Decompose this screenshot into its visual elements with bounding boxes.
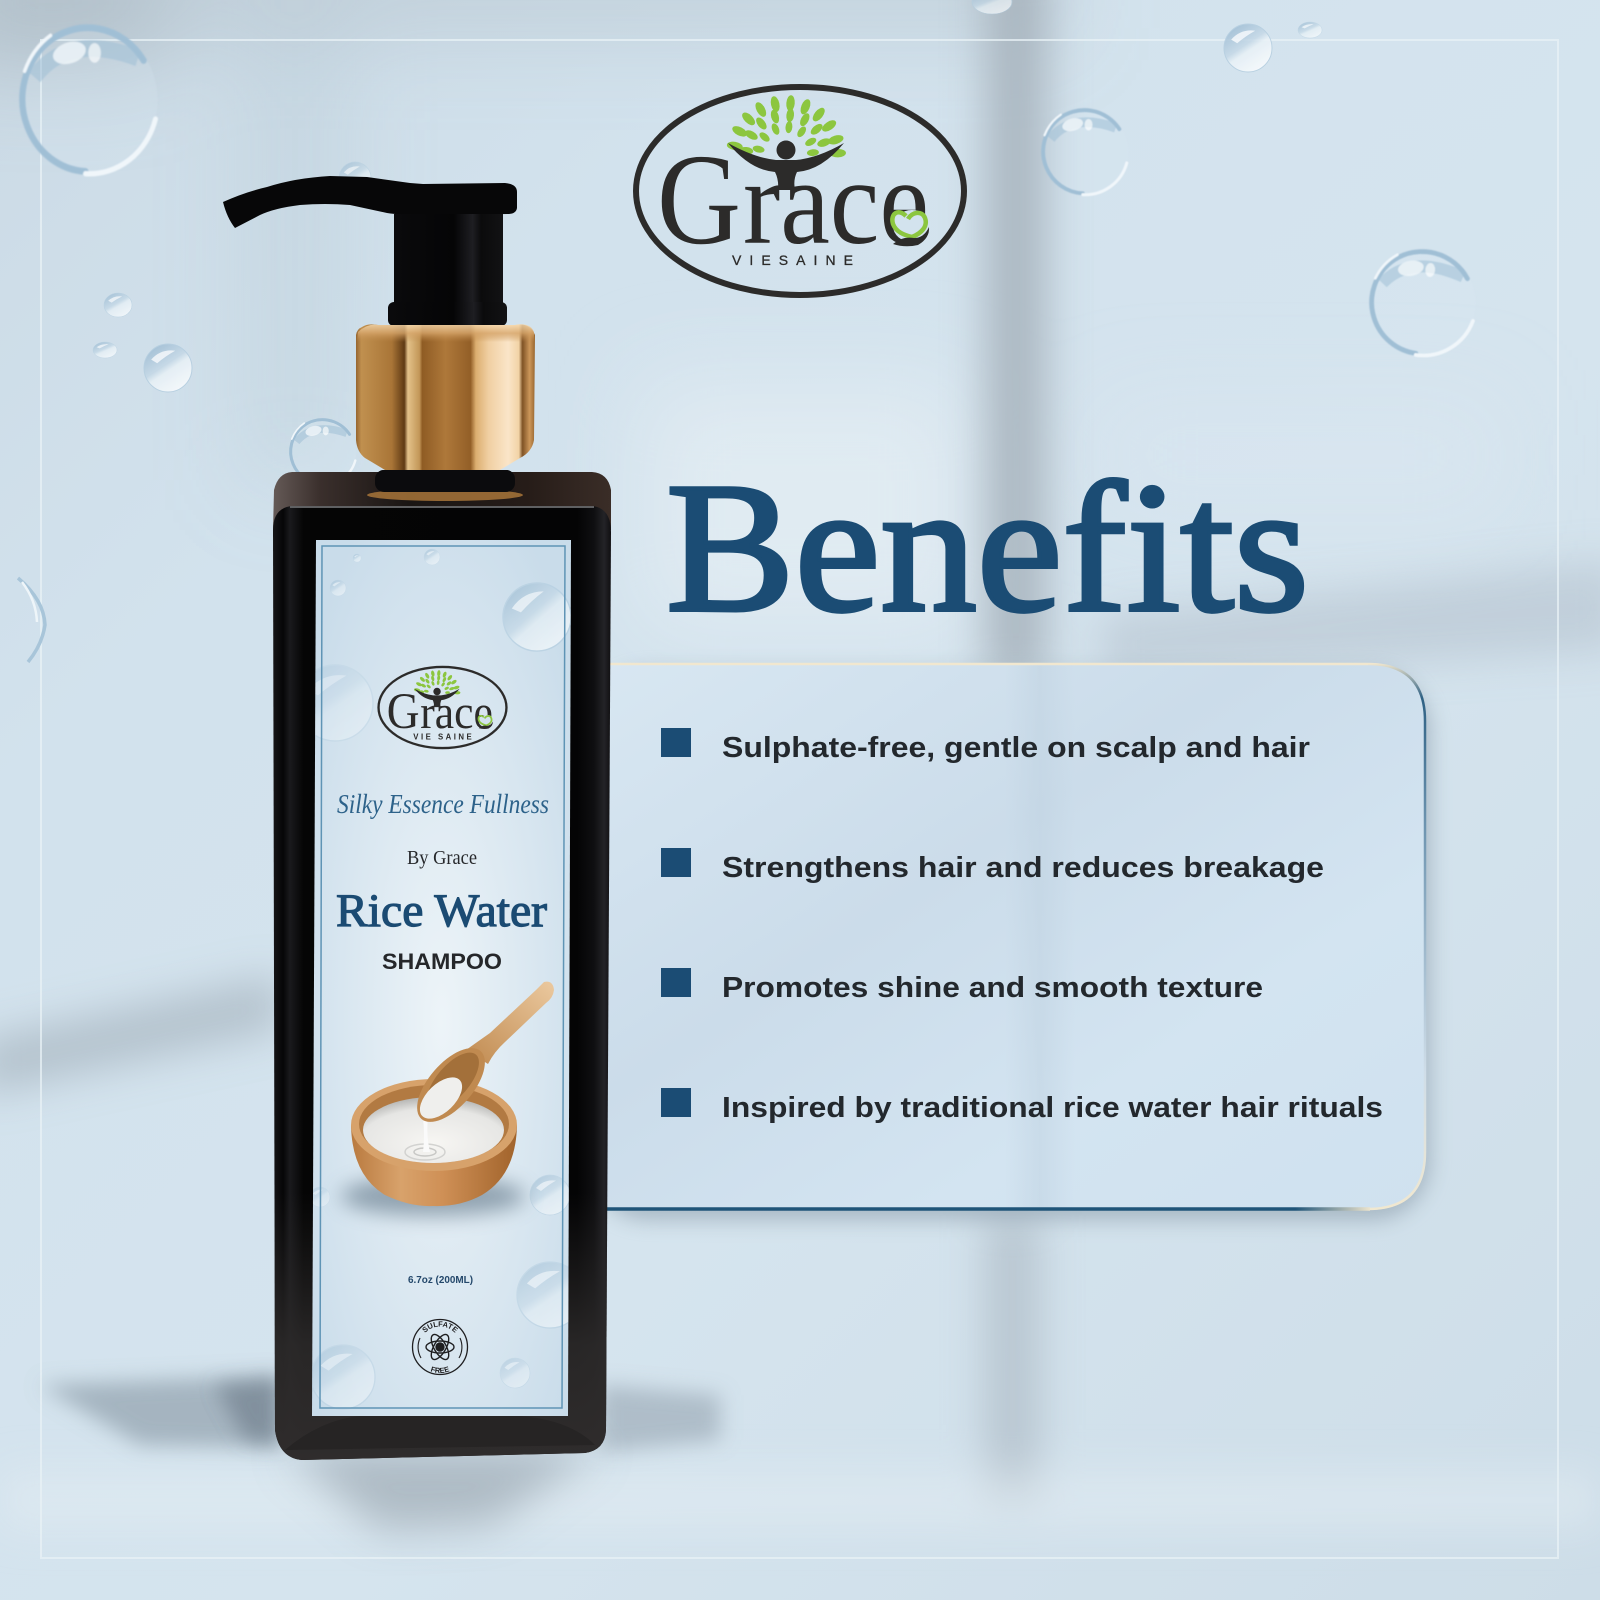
sulfate free badge: FREE [430, 1366, 450, 1374]
label logo: G [387, 683, 419, 739]
label logo [379, 667, 506, 748]
pump spout and head [223, 176, 517, 228]
pump stem [394, 214, 503, 306]
bottle body [273, 506, 611, 1460]
by grace: By Grace [407, 847, 477, 869]
collar neck [375, 470, 515, 494]
sulfate free badge [412, 1318, 468, 1376]
product bottle [223, 176, 611, 1460]
water droplets [18, 0, 1480, 662]
brand logo: VIESAINE [732, 252, 853, 268]
heading: Benefits [666, 445, 1309, 651]
tagline: Silky Essence Fullness [337, 789, 549, 819]
gold collar [356, 324, 535, 470]
benefit 2: Strengthens hair and reduces breakage [722, 852, 1324, 884]
pump dispenser [223, 176, 535, 494]
gold reflection [367, 489, 523, 501]
brand logo [636, 87, 964, 295]
pump ring [388, 302, 507, 326]
benefit 3: Promotes shine and smooth texture [722, 972, 1263, 1004]
wooden spoon [405, 982, 554, 1133]
collar bevel [357, 324, 534, 342]
volume text: 6.7oz (200ML) [408, 1275, 473, 1286]
label logo: race [420, 687, 493, 739]
product label [312, 540, 571, 1416]
bottle shoulder [273, 472, 611, 530]
bowl of rice water [341, 982, 554, 1216]
label droplets [297, 549, 583, 1409]
shampoo: SHAMPOO [382, 949, 502, 974]
benefit 1: Sulphate-free, gentle on scalp and hair [722, 732, 1310, 764]
brand logo: race [743, 135, 929, 270]
panel: benefits list [590, 663, 1430, 1220]
benefit 4: Inspired by traditional rice water hair rituals [722, 1092, 1383, 1124]
sulfate free badge: SULFATE [422, 1321, 458, 1333]
brand logo: G [657, 128, 741, 272]
label logo: VIE SAINE [413, 732, 472, 741]
product name: Rice Water [336, 885, 547, 937]
